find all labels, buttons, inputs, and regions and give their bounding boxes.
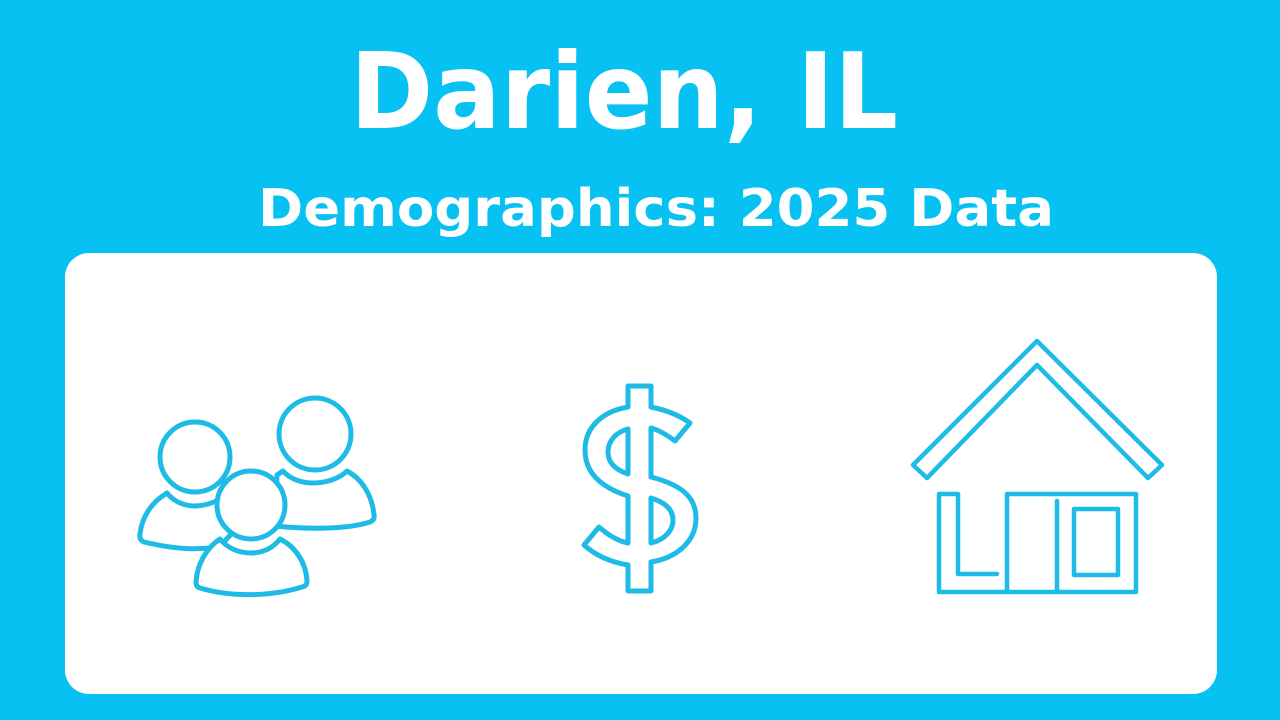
subtitle: Demographics: 2025 Data: [258, 179, 1054, 239]
title: Darien, IL: [350, 31, 898, 153]
window: [1074, 509, 1118, 575]
panel: white card: [65, 253, 1217, 694]
icon: dollar sign: [584, 386, 696, 591]
icon: people group: [140, 398, 374, 595]
roof: [913, 341, 1162, 478]
icon: house: [913, 341, 1162, 592]
house body: [939, 494, 1136, 592]
